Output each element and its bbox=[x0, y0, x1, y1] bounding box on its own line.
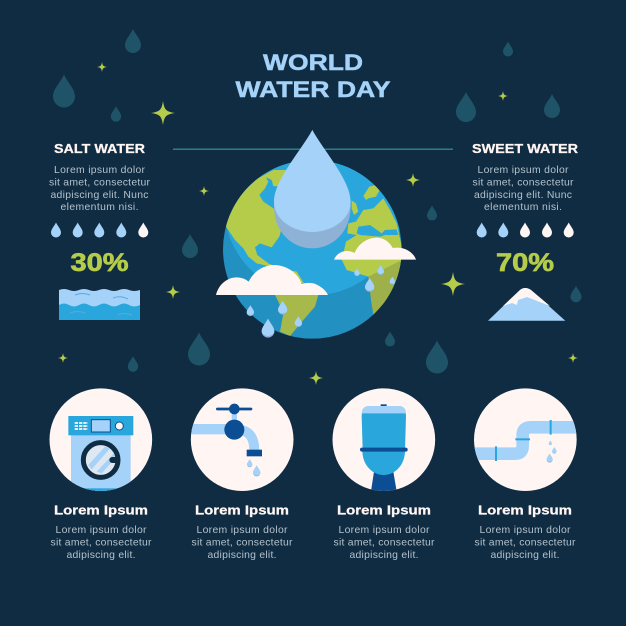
heading: Lorem Ipsum bbox=[337, 504, 431, 518]
sweet water text: sit amet, consectetur bbox=[472, 178, 574, 188]
card: washing machine bbox=[49, 388, 152, 561]
text bbox=[474, 525, 576, 561]
icon: faucet bbox=[190, 388, 293, 491]
text: sit amet, consectetur bbox=[334, 538, 435, 548]
heading: salt water: SALT WATER bbox=[54, 142, 145, 156]
text: Lorem ipsum dolor bbox=[196, 525, 288, 536]
earth globe with drop and clouds bbox=[216, 117, 416, 339]
text: Lorem ipsum dolor bbox=[338, 525, 430, 536]
salt water text: Lorem ipsum dolor bbox=[54, 165, 146, 176]
icon: toilet bbox=[332, 388, 435, 493]
sweet water text bbox=[472, 165, 574, 213]
large water drop bbox=[274, 130, 351, 248]
rain drops bbox=[246, 264, 396, 338]
card: faucet bbox=[190, 388, 293, 561]
salt water text bbox=[49, 165, 151, 213]
text bbox=[334, 525, 435, 561]
text: Lorem ipsum dolor bbox=[480, 525, 571, 536]
sweet water text: Lorem ipsum dolor bbox=[478, 165, 569, 176]
text bbox=[50, 525, 152, 561]
30 percent: 30% bbox=[70, 249, 128, 277]
panel: sweet water bbox=[472, 142, 578, 321]
text: adipiscing elit. bbox=[208, 550, 276, 561]
sweet water drops bbox=[477, 222, 574, 238]
card: pipes bbox=[470, 388, 580, 561]
sparkle stars bbox=[58, 62, 578, 385]
text: sit amet, consectetur bbox=[50, 538, 152, 548]
sweet water text: elementum nisi. bbox=[484, 202, 562, 213]
text: sit amet, consectetur bbox=[474, 538, 576, 548]
salt water text: sit amet, consectetur bbox=[49, 178, 151, 188]
heading: Lorem Ipsum bbox=[54, 504, 148, 518]
salt water text: adipiscing elit. Nunc bbox=[50, 190, 148, 201]
icon: mountain bbox=[488, 288, 565, 321]
heading: Lorem Ipsum bbox=[478, 504, 572, 518]
title: WORLD bbox=[263, 50, 363, 75]
icon: leaking pipe bbox=[470, 388, 580, 491]
title: WATER DAY bbox=[236, 77, 390, 102]
icon: washing machine bbox=[49, 388, 152, 493]
text: adipiscing elit. bbox=[350, 550, 418, 561]
text bbox=[192, 525, 293, 561]
salt water drops bbox=[51, 222, 148, 238]
background drops bbox=[53, 29, 582, 374]
panel: salt water bbox=[49, 142, 151, 320]
salt water text: elementum nisi. bbox=[60, 202, 138, 213]
sweet water text: adipiscing elit. Nunc bbox=[474, 190, 572, 201]
heading: Lorem Ipsum bbox=[195, 504, 289, 518]
text: adipiscing elit. bbox=[66, 550, 136, 561]
text: Lorem ipsum dolor bbox=[56, 525, 147, 536]
icon: waves bbox=[59, 289, 140, 320]
text: sit amet, consectetur bbox=[192, 538, 293, 548]
text: adipiscing elit. bbox=[490, 550, 560, 561]
card: toilet bbox=[332, 388, 435, 561]
70 percent: 70% bbox=[496, 249, 554, 277]
heading: sweet water: SWEET WATER bbox=[472, 142, 578, 156]
title bbox=[236, 50, 390, 102]
clouds bbox=[216, 238, 416, 295]
